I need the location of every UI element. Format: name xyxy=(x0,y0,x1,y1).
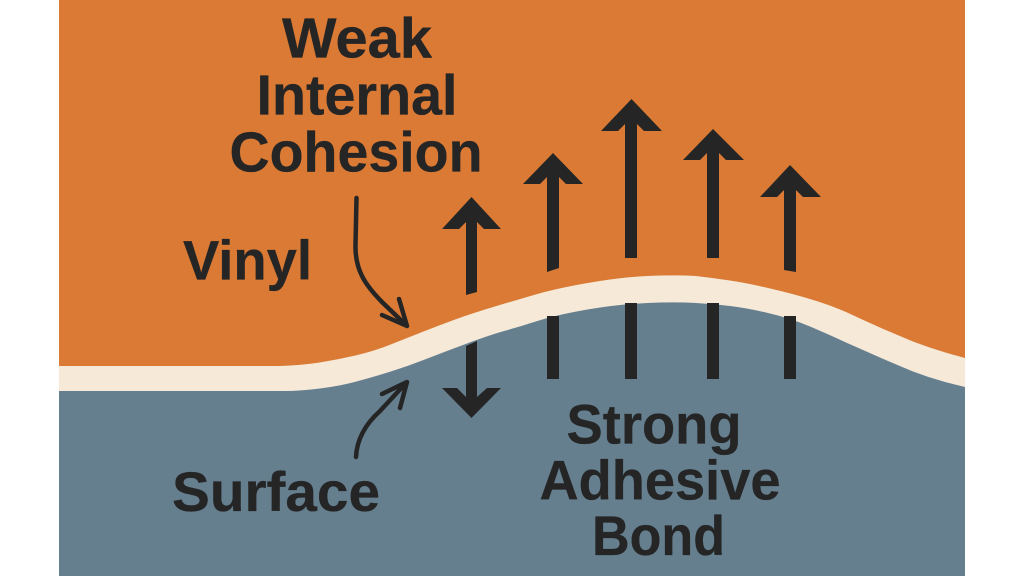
arrow: double-headed first xyxy=(442,197,501,418)
heading: strong adhesive bond xyxy=(540,392,780,567)
heading: strong adhesive bond: Bond xyxy=(592,504,725,567)
label: vinyl: Vinyl xyxy=(183,228,312,292)
arrow: third xyxy=(601,99,662,379)
heading: weak internal cohesion: Internal xyxy=(256,64,458,128)
arrow: second xyxy=(523,153,583,379)
panel: surface layer xyxy=(59,302,965,576)
heading: strong adhesive bond: Strong xyxy=(566,392,742,456)
label: surface: Surface xyxy=(172,460,380,523)
heading: weak internal cohesion: Weak xyxy=(282,6,432,70)
heading: weak internal cohesion: Cohesion xyxy=(230,120,482,184)
arrow: cohesion pointer xyxy=(355,198,407,326)
panel: vinyl layer xyxy=(59,0,965,366)
arrow: fourth xyxy=(683,129,744,379)
heading: weak internal cohesion xyxy=(230,6,482,184)
adhesive band xyxy=(59,272,965,392)
heading: strong adhesive bond: Adhesive xyxy=(540,448,780,512)
arrow: fifth xyxy=(760,165,821,379)
arrow: surface pointer xyxy=(356,382,407,457)
